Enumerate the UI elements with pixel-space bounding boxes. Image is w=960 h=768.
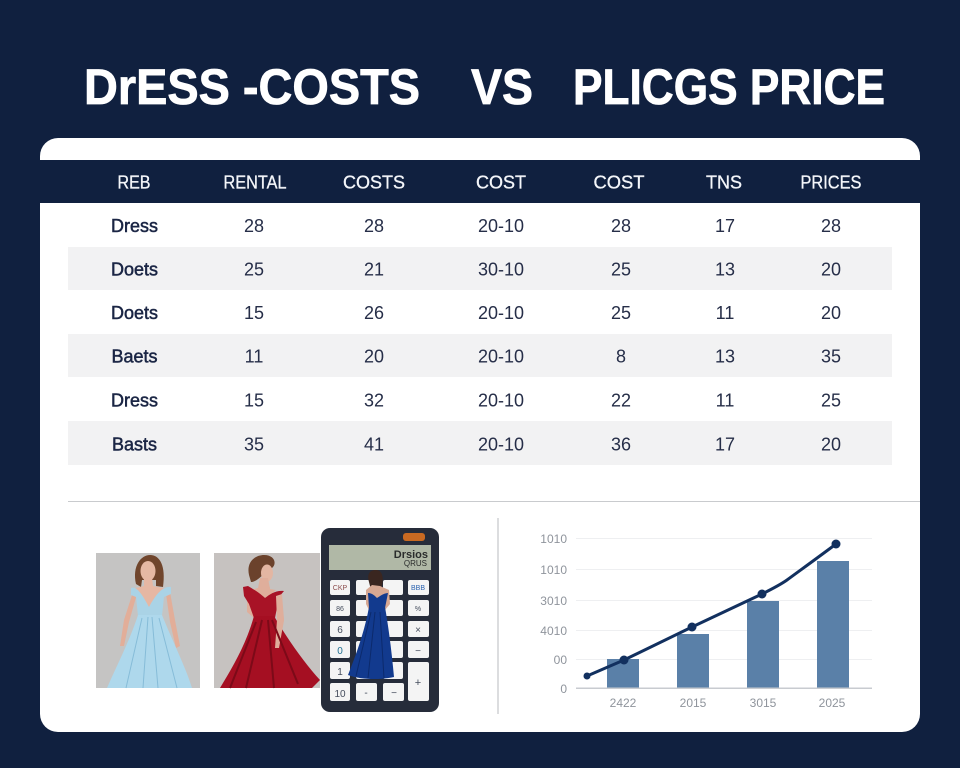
table row 6: 36 xyxy=(611,434,631,454)
table row 6: 17 xyxy=(715,434,735,454)
table row 5: 15 xyxy=(244,390,264,410)
table header row xyxy=(40,160,920,203)
calculator display text xyxy=(394,549,428,568)
y axis labels xyxy=(540,532,567,696)
table row 5: 32 xyxy=(364,390,384,410)
y axis labels: 1010 xyxy=(540,532,567,546)
table row 3 xyxy=(111,303,841,323)
photo: red dress xyxy=(214,553,320,688)
y axis labels: 3010 xyxy=(540,594,567,608)
table row 3: 20-10 xyxy=(478,303,524,323)
bars xyxy=(607,561,849,688)
table row 2: 21 xyxy=(364,260,384,280)
table row 6: 20-10 xyxy=(478,434,524,454)
table row 6 xyxy=(68,421,892,465)
table row 1: Dress xyxy=(111,216,158,236)
y axis labels: 1010 xyxy=(540,563,567,577)
table row 4: 13 xyxy=(715,346,735,366)
calculator display text: QRUS xyxy=(404,559,427,568)
calculator key labels: 0 xyxy=(337,646,343,657)
chart: bars and trend line xyxy=(540,532,872,710)
table row 1: 28 xyxy=(611,216,631,236)
table row 3: 11 xyxy=(716,303,734,323)
x axis labels: 3015 xyxy=(750,696,777,710)
table row 2: Doets xyxy=(111,260,158,280)
panel: main white card xyxy=(40,138,920,732)
table row 6: Basts xyxy=(112,434,157,454)
table row 2: 20 xyxy=(821,260,841,280)
table row 3: 26 xyxy=(364,303,384,323)
calculator key labels: CKP xyxy=(333,585,348,592)
table row 3: 20 xyxy=(821,303,841,323)
table row 5: 20-10 xyxy=(478,390,524,410)
table row 5: Dress xyxy=(111,390,158,410)
photo: navy blue dress on calculator xyxy=(348,570,394,679)
table row 4: 8 xyxy=(616,346,626,366)
x axis labels: 2025 xyxy=(819,696,846,710)
table row 4: 11 xyxy=(245,346,263,366)
table row 2: 25 xyxy=(244,260,264,280)
calculator key labels: + xyxy=(415,677,421,689)
table row 3: 25 xyxy=(611,303,631,323)
table header row: TNS xyxy=(706,172,742,192)
icon: calculator xyxy=(321,528,439,712)
calculator key labels: - xyxy=(364,688,368,699)
table row 2: 13 xyxy=(715,260,735,280)
photo: light blue dress xyxy=(96,553,200,688)
panel: cost table xyxy=(40,160,920,465)
table row 4: Baets xyxy=(111,346,158,366)
calculator key labels xyxy=(333,585,425,700)
calculator key labels: 1 xyxy=(337,667,343,678)
table row 1 xyxy=(111,216,841,236)
table row 1: 20-10 xyxy=(478,216,524,236)
calculator display text: Drsios xyxy=(394,549,428,561)
table row 6: 41 xyxy=(364,434,384,454)
title: VS xyxy=(471,59,533,115)
table row 1: 17 xyxy=(715,216,735,236)
calculator key labels: 10 xyxy=(334,689,346,700)
table header row: REB xyxy=(118,172,150,192)
calculator key labels: BBB xyxy=(411,585,425,592)
chart grid lines xyxy=(576,538,872,660)
table row 5 xyxy=(111,390,841,410)
y axis labels: 0 xyxy=(560,682,567,696)
table row 6: 20 xyxy=(821,434,841,454)
table row 5: 11 xyxy=(716,390,734,410)
title xyxy=(84,59,885,115)
calculator key labels: − xyxy=(415,646,421,657)
table row 4: 20-10 xyxy=(478,346,524,366)
calculator key labels: % xyxy=(415,606,421,613)
y axis labels: 4010 xyxy=(540,624,567,638)
table row 1: 28 xyxy=(364,216,384,236)
table row 2 xyxy=(68,247,892,290)
table row 6: 35 xyxy=(244,434,264,454)
x axis labels: 2422 xyxy=(610,696,637,710)
table row 4: 35 xyxy=(821,346,841,366)
table row 5: 22 xyxy=(611,390,631,410)
table header row: COST xyxy=(476,172,526,192)
y axis labels: 00 xyxy=(554,653,567,667)
x axis labels: 2015 xyxy=(680,696,707,710)
table header row: PRICES xyxy=(800,172,862,192)
table row 3: Doets xyxy=(111,303,158,323)
table header row: COST xyxy=(594,172,644,192)
table row 2: 25 xyxy=(611,260,631,280)
title: PLICGS PRICE xyxy=(573,59,885,115)
table row 3: 15 xyxy=(244,303,264,323)
calculator key labels: 86 xyxy=(336,606,344,613)
calculator key labels: × xyxy=(415,625,421,636)
table header row: RENTAL xyxy=(224,172,286,192)
table row 2: 30-10 xyxy=(478,260,524,280)
title: DrESS -COSTS xyxy=(84,59,420,115)
table row 1: 28 xyxy=(244,216,264,236)
table header row: COSTS xyxy=(343,172,405,192)
table row 4: 20 xyxy=(364,346,384,366)
trend line xyxy=(584,540,840,680)
table row 5: 25 xyxy=(821,390,841,410)
calculator key labels: − xyxy=(391,688,397,699)
calculator key labels: 6 xyxy=(337,625,343,636)
table row 4 xyxy=(68,334,892,377)
table row 1: 28 xyxy=(821,216,841,236)
x axis labels xyxy=(610,696,846,710)
